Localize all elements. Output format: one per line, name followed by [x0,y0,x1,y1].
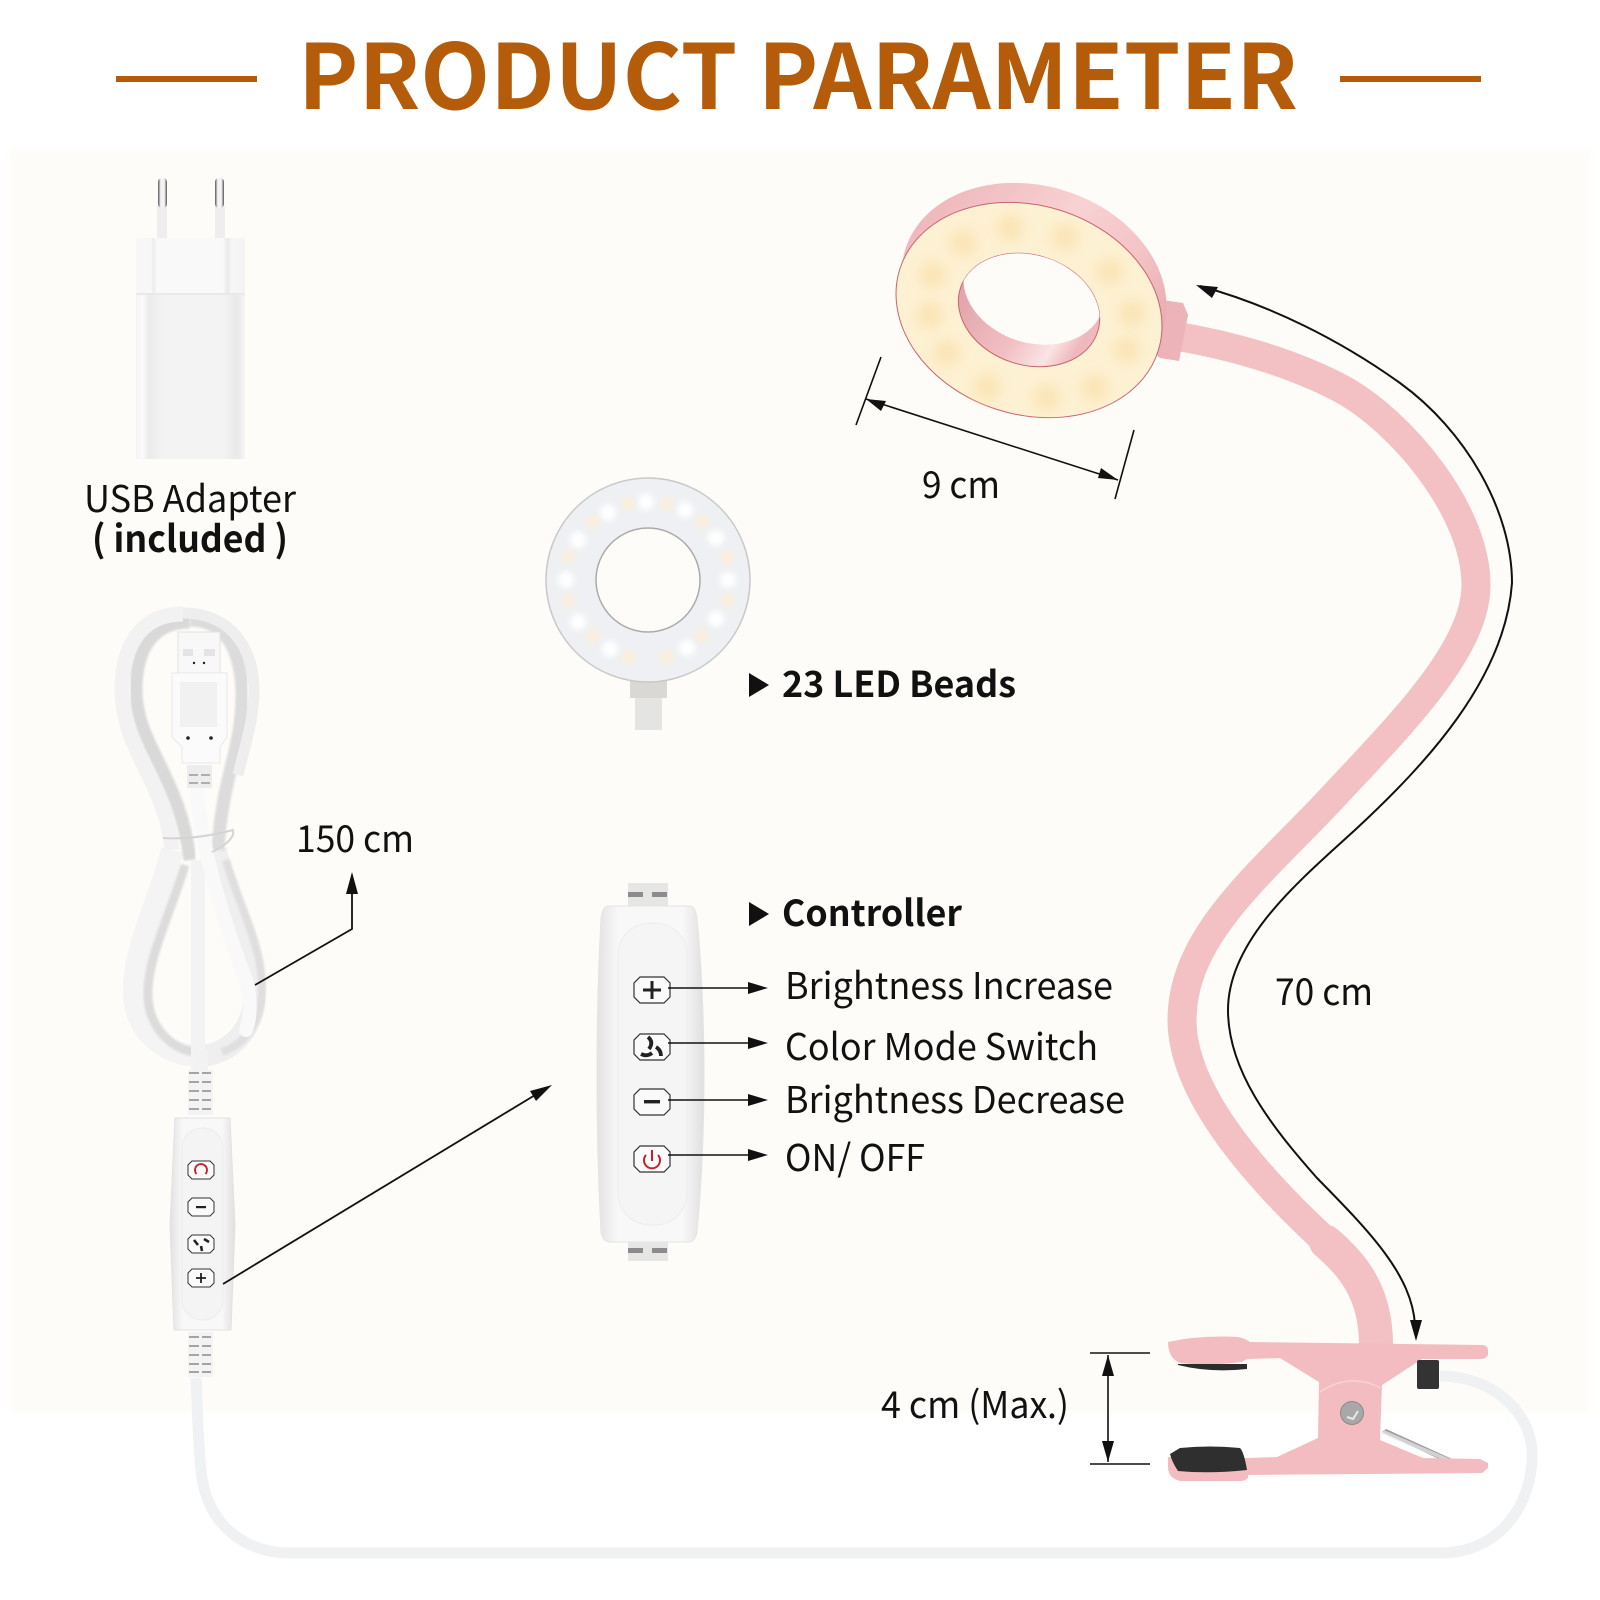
label: USB adapter [84,469,297,563]
callouts: controller buttons: Brightness Increase [785,956,1113,1010]
callouts: controller buttons: Color Mode Switch [785,1017,1098,1071]
dimension: 70 cm arc [1196,285,1512,1341]
lamp: ring head [896,182,1188,418]
label: USB adapter: USB Adapter [84,469,297,523]
icon: large controller [597,883,704,1261]
dimension: 150 cm cable [255,809,414,985]
background panel [10,150,1590,1412]
icon: USB plug [172,632,227,788]
button: power [634,1146,670,1172]
dimension: 150 cm cable: 150 cm [296,809,414,863]
dimension: 4 cm max [881,1353,1150,1464]
arrow: small controller to large controller [223,1085,552,1284]
dimension: 9 cm [856,357,1134,509]
lamp: clamp [1168,1337,1488,1481]
icon: LED ring front view [546,478,750,730]
callouts: controller buttons: Controller [782,885,962,937]
label: USB adapter: ( included ) [92,509,288,563]
button: color mode [634,1034,670,1060]
dimension: 9 cm: 9 cm [922,455,1000,509]
lamp: gooseneck arm [1175,336,1476,1345]
cable running under the layout [196,1376,1532,1553]
icon: small inline controller [170,1050,235,1377]
button: minus [634,1089,670,1115]
button: plus [634,977,670,1003]
callouts: controller buttons: Brightness Decrease [785,1070,1125,1124]
dimension: 4 cm max: 4 cm (Max.) [881,1375,1069,1429]
title: PRODUCT PARAMETER [298,5,1298,135]
icon: coiled USB cable [122,613,262,1080]
callouts: controller buttons: ON/ OFF [785,1128,925,1182]
label: 23 LED beads: 23 LED Beads [782,656,1016,708]
dimension: 70 cm arc: 70 cm [1275,962,1373,1016]
callouts: controller buttons [668,885,1125,1182]
icon: USB power adapter [136,178,245,459]
